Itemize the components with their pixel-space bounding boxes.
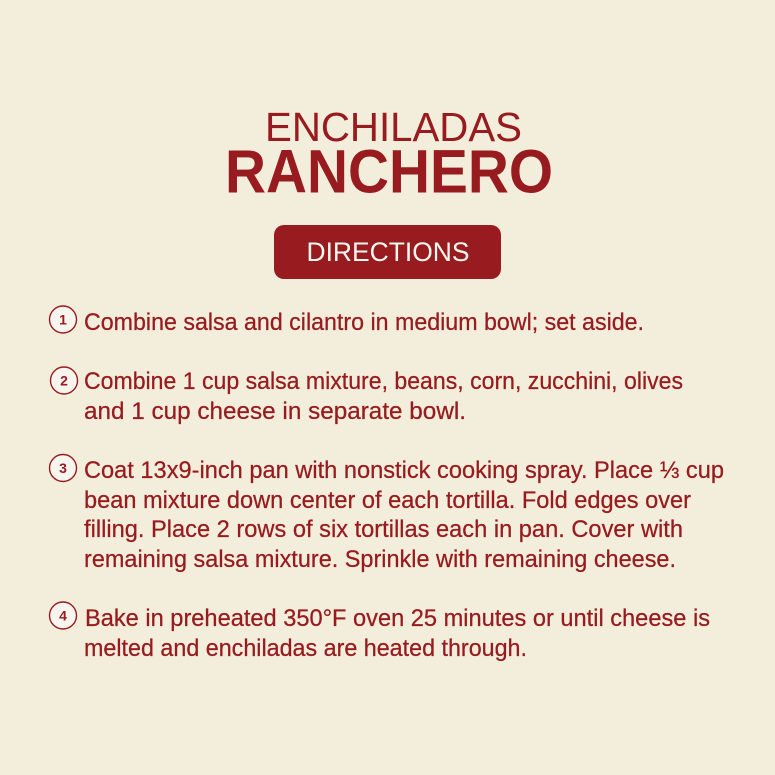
step 2: Combine 1 cup salsa mixture, beans, corn, zucchini, olives bbox=[84, 368, 683, 395]
step 1: Combine salsa and cilantro in medium bowl; set aside. bbox=[84, 309, 644, 336]
icon: number 2 bbox=[50, 367, 78, 394]
step 3: Coat 13x9-inch pan with nonstick cooking spray. Place ⅓ cup bbox=[84, 457, 724, 484]
step 4: melted and enchiladas are heated through. bbox=[84, 635, 527, 662]
directions badge: DIRECTIONS bbox=[306, 237, 470, 267]
icon: number 2: 2 bbox=[60, 372, 68, 388]
title: ENCHILADAS bbox=[265, 104, 522, 150]
step 3: remaining salsa mixture. Sprinkle with remaining cheese. bbox=[84, 546, 676, 573]
title bbox=[225, 104, 553, 206]
directions badge bbox=[274, 225, 501, 279]
step 4: Bake in preheated 350°F oven 25 minutes or until cheese is bbox=[85, 605, 710, 632]
step 3: filling. Place 2 rows of six tortillas each in pan. Cover with bbox=[84, 516, 683, 543]
step 4 bbox=[50, 602, 710, 662]
step 3 bbox=[50, 454, 724, 573]
step 2: and 1 cup cheese in separate bowl. bbox=[84, 398, 466, 425]
icon: number 1 bbox=[50, 306, 76, 333]
icon: number 1: 1 bbox=[59, 312, 67, 328]
icon: number 3: 3 bbox=[59, 460, 67, 476]
icon: number 3 bbox=[50, 454, 76, 482]
title: RANCHERO bbox=[225, 138, 553, 206]
step 2 bbox=[50, 367, 683, 425]
step 3: bean mixture down center of each tortilla. Fold edges over bbox=[84, 487, 691, 514]
icon: number 4 bbox=[50, 602, 76, 629]
icon: number 4: 4 bbox=[59, 608, 67, 624]
